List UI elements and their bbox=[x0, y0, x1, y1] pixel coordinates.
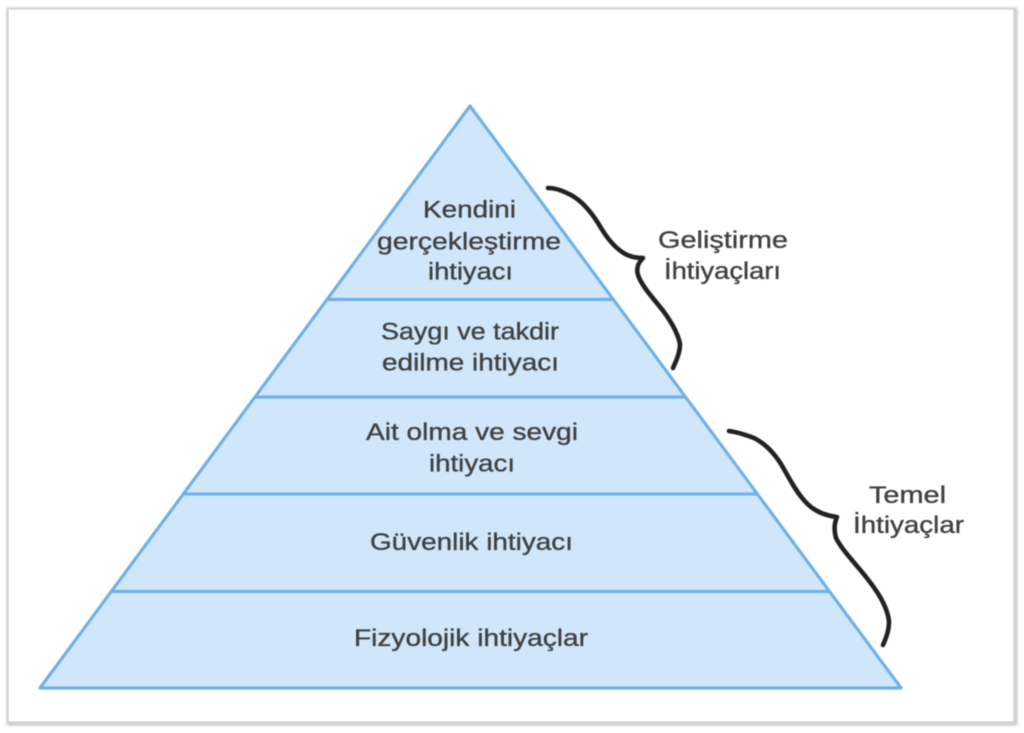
level: esteem bbox=[381, 318, 559, 376]
level: esteem: Saygı ve takdir bbox=[381, 318, 559, 346]
pyramid bbox=[40, 106, 901, 688]
level: safety: Güvenlik ihtiyacı bbox=[370, 529, 573, 556]
level: physiological: Fizyolojik ihtiyaçlar bbox=[354, 625, 588, 652]
label: growth needs bbox=[658, 227, 788, 285]
level: self-actualisation: gerçekleştirme bbox=[377, 228, 561, 256]
level: belonging: Ait olma ve sevgi bbox=[366, 419, 578, 446]
brace: basic needs bbox=[729, 431, 889, 645]
level: self-actualisation: ihtiyacı bbox=[428, 258, 513, 286]
level: belonging: ihtiyacı bbox=[429, 450, 515, 478]
level: self-actualisation bbox=[377, 196, 561, 286]
label: basic needs: İhtiyaçlar bbox=[853, 512, 964, 539]
level: esteem: edilme ihtiyacı bbox=[382, 350, 559, 376]
label: growth needs: Geliştirme bbox=[658, 227, 788, 254]
brace: growth needs bbox=[548, 188, 680, 368]
label: basic needs: Temel bbox=[869, 482, 946, 509]
pyramid level labels bbox=[366, 196, 578, 556]
level: self-actualisation: Kendini bbox=[423, 196, 516, 224]
level: belonging bbox=[366, 419, 578, 478]
label: basic needs bbox=[853, 482, 964, 539]
label: growth needs: İhtiyaçları bbox=[664, 258, 781, 285]
